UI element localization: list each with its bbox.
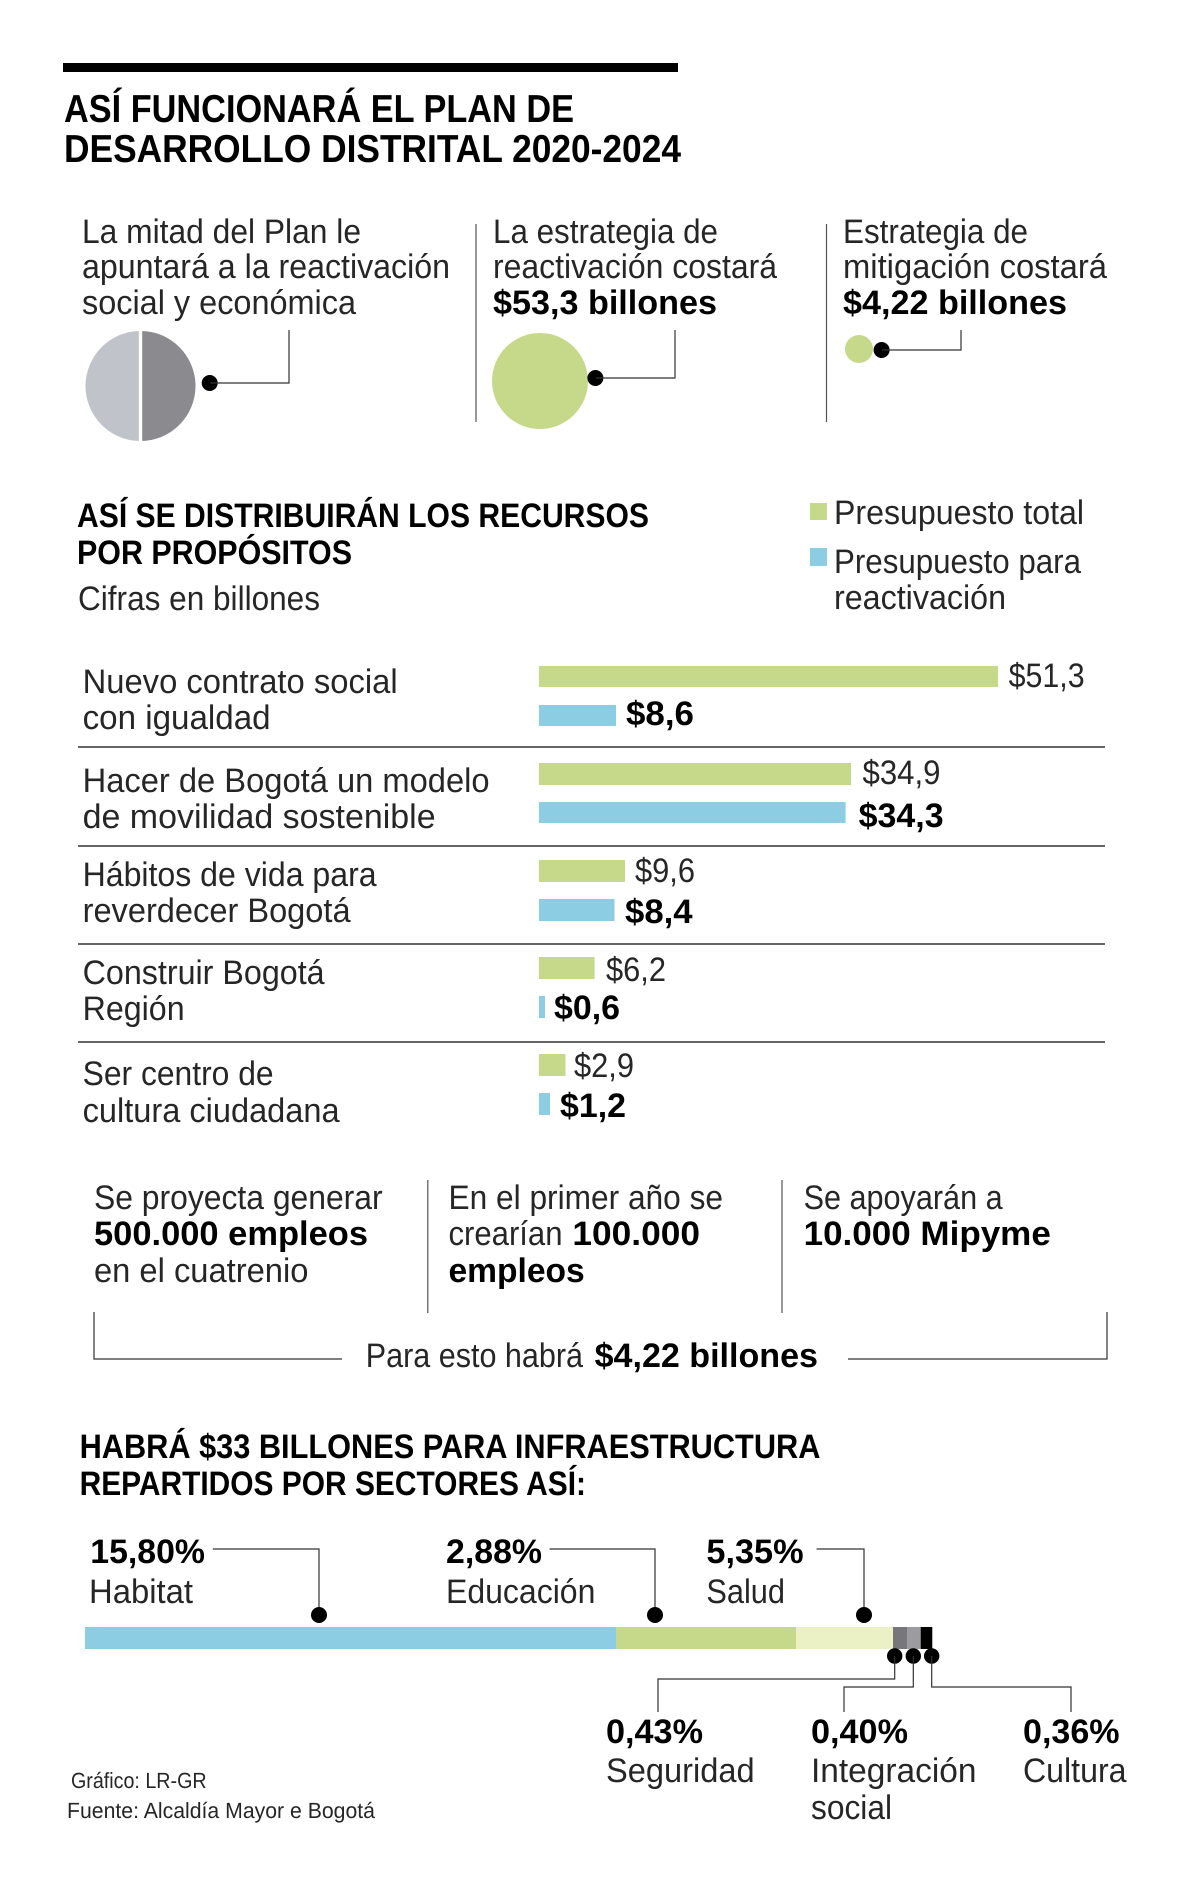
subtitle: units: Cifras en billones	[78, 580, 320, 618]
row: nuevo contrato social: Nuevo contrato social	[83, 663, 398, 701]
text: reactivation cost: reactivación costará	[493, 248, 777, 286]
text: la mitad del plan: apuntará a la reactivación	[82, 248, 450, 286]
text: 100.000 empleos: En el primer año se	[448, 1179, 723, 1217]
stacked bar	[85, 1627, 932, 1649]
row: cultura ciudadana	[83, 1047, 634, 1130]
label: educación	[446, 1533, 663, 1623]
label: cultura: 0,36%	[1023, 1713, 1120, 1751]
row: nuevo contrato social: con igualdad	[83, 699, 271, 737]
text: mitigation cost: Estrategia de	[843, 213, 1028, 251]
connector: pie	[202, 330, 289, 391]
label: habitat: Habitat	[89, 1573, 194, 1611]
row: cultura ciudadana: $1,2	[560, 1087, 626, 1125]
text: mitigation cost	[843, 213, 1107, 322]
source credits: Fuente: Alcaldía Mayor e Bogotá	[67, 1798, 376, 1823]
text: mitigation cost: mitigación costará	[843, 248, 1107, 286]
row: modelo de movilidad: $34,9	[862, 754, 940, 792]
label: integración social: Integración	[811, 1752, 976, 1790]
label: integración social	[811, 1713, 976, 1827]
row: bogotá región: Región	[83, 990, 185, 1028]
label: habitat	[89, 1533, 327, 1623]
divider	[475, 224, 477, 422]
connector: integración social	[844, 1648, 921, 1712]
heading: distribution of resources	[77, 496, 649, 572]
text: 10.000 Mipyme: 10.000 Mipyme	[804, 1215, 1051, 1253]
legend: reactivación	[834, 579, 1006, 617]
heading: distribution of resources: POR PROPÓSITOS	[77, 533, 352, 572]
source credits	[67, 1768, 376, 1823]
row: modelo de movilidad: $34,3	[859, 797, 944, 835]
connector: large circle	[587, 330, 675, 386]
title: DESARROLLO DISTRITAL 2020-2024	[64, 128, 681, 171]
label: seguridad: Seguridad	[606, 1752, 755, 1790]
label: salud: Salud	[706, 1573, 785, 1611]
row: cultura ciudadana: cultura ciudadana	[83, 1092, 340, 1130]
panel: mitigation strategy	[843, 213, 1107, 363]
heading: infrastructure: REPARTIDOS POR SECTORES ASÍ:	[80, 1464, 586, 1503]
row: bogotá región: $0,6	[554, 989, 620, 1027]
row: hábitos de vida: $9,6	[635, 852, 695, 890]
row: nuevo contrato social: $51,3	[1009, 657, 1085, 695]
row: nuevo contrato social	[83, 657, 1085, 737]
bracket	[94, 1312, 1107, 1359]
heading: distribution of resources: ASÍ SE DISTRIBUIRÁN LOS RECURSOS	[77, 496, 649, 535]
panel: half of the plan	[82, 213, 450, 443]
row: bogotá región	[83, 951, 666, 1028]
label: cultura: Cultura	[1023, 1752, 1127, 1790]
text: 10.000 Mipyme: Se apoyarán a	[804, 1179, 1003, 1217]
text: 100.000 empleos: empleos	[448, 1252, 585, 1290]
chart: budget by purpose	[78, 657, 1105, 1130]
text: mitigation cost: $4,22 billones	[843, 284, 1067, 322]
source credits: Gráfico: LR-GR	[71, 1768, 207, 1793]
text: la mitad del plan	[82, 213, 450, 322]
label: integración social: social	[811, 1789, 892, 1827]
legend	[810, 494, 1084, 617]
label: seguridad	[606, 1713, 755, 1790]
legend: Presupuesto total	[834, 494, 1084, 532]
connector: seguridad	[658, 1648, 902, 1712]
label: salud: 5,35%	[706, 1533, 804, 1571]
text: 100.000 empleos: crearían	[448, 1215, 562, 1253]
label: seguridad: 0,43%	[606, 1713, 703, 1751]
heading: infrastructure	[80, 1427, 820, 1503]
row: bogotá región: $6,2	[606, 951, 666, 989]
text: 500.000 empleos: en el cuatrenio	[94, 1252, 308, 1290]
label: salud	[706, 1533, 872, 1623]
label: educación: 2,88%	[446, 1533, 542, 1571]
text: la mitad del plan: La mitad del Plan le	[82, 213, 361, 251]
row: hábitos de vida: reverdecer Bogotá	[83, 892, 351, 930]
row: cultura ciudadana: Ser centro de	[83, 1055, 274, 1093]
text: la mitad del plan: social y económica	[82, 284, 356, 322]
text: para esto habrá: Para esto habrá	[366, 1337, 583, 1375]
connector: small circle	[874, 330, 961, 358]
label: educación: Educación	[446, 1573, 595, 1611]
text: para esto habrá: $4,22 billones	[595, 1337, 818, 1375]
text: 500.000 empleos: 500.000 empleos	[94, 1215, 368, 1253]
divider	[826, 224, 828, 422]
text: reactivation cost: $53,3 billones	[493, 284, 717, 322]
connector: cultura	[924, 1648, 1071, 1712]
label: cultura	[1023, 1713, 1127, 1790]
title: ASÍ FUNCIONARÁ EL PLAN DE	[64, 87, 574, 131]
row: bogotá región: Construir Bogotá	[83, 954, 325, 992]
row: hábitos de vida: $8,4	[625, 893, 693, 931]
legend: Presupuesto para	[834, 543, 1081, 581]
text: 100.000 empleos	[448, 1179, 723, 1290]
row: nuevo contrato social: $8,6	[626, 695, 694, 733]
icon: small green circle	[845, 335, 873, 363]
chart: infrastructure by sector	[85, 1533, 1127, 1827]
title	[64, 87, 681, 171]
panel: employment figures	[94, 1179, 1107, 1375]
text: reactivation cost	[493, 213, 777, 322]
panel: reactivation strategy	[492, 213, 777, 429]
text: 10.000 Mipyme	[804, 1179, 1051, 1253]
label: integración social: 0,40%	[811, 1713, 908, 1751]
row: modelo de movilidad: de movilidad sostenible	[83, 798, 436, 836]
row: hábitos de vida: Hábitos de vida para	[83, 856, 377, 894]
text: reactivation cost: La estrategia de	[493, 213, 718, 251]
text: 500.000 empleos: Se proyecta generar	[94, 1179, 383, 1217]
row: modelo de movilidad	[83, 754, 944, 836]
text: 100.000 empleos: 100.000	[572, 1215, 700, 1253]
row: modelo de movilidad: Hacer de Bogotá un modelo	[83, 762, 490, 800]
text: para esto habrá	[366, 1337, 818, 1375]
row: cultura ciudadana: $2,9	[574, 1047, 634, 1085]
label: habitat: 15,80%	[90, 1533, 205, 1571]
text: 500.000 empleos	[94, 1179, 383, 1290]
heading: infrastructure: HABRÁ $33 BILLONES PARA INFRAESTRUCTURA	[80, 1427, 820, 1466]
title rule	[63, 63, 678, 72]
row: hábitos de vida	[83, 852, 695, 931]
icon: large green circle	[492, 333, 588, 429]
icon: half pie	[86, 329, 196, 443]
